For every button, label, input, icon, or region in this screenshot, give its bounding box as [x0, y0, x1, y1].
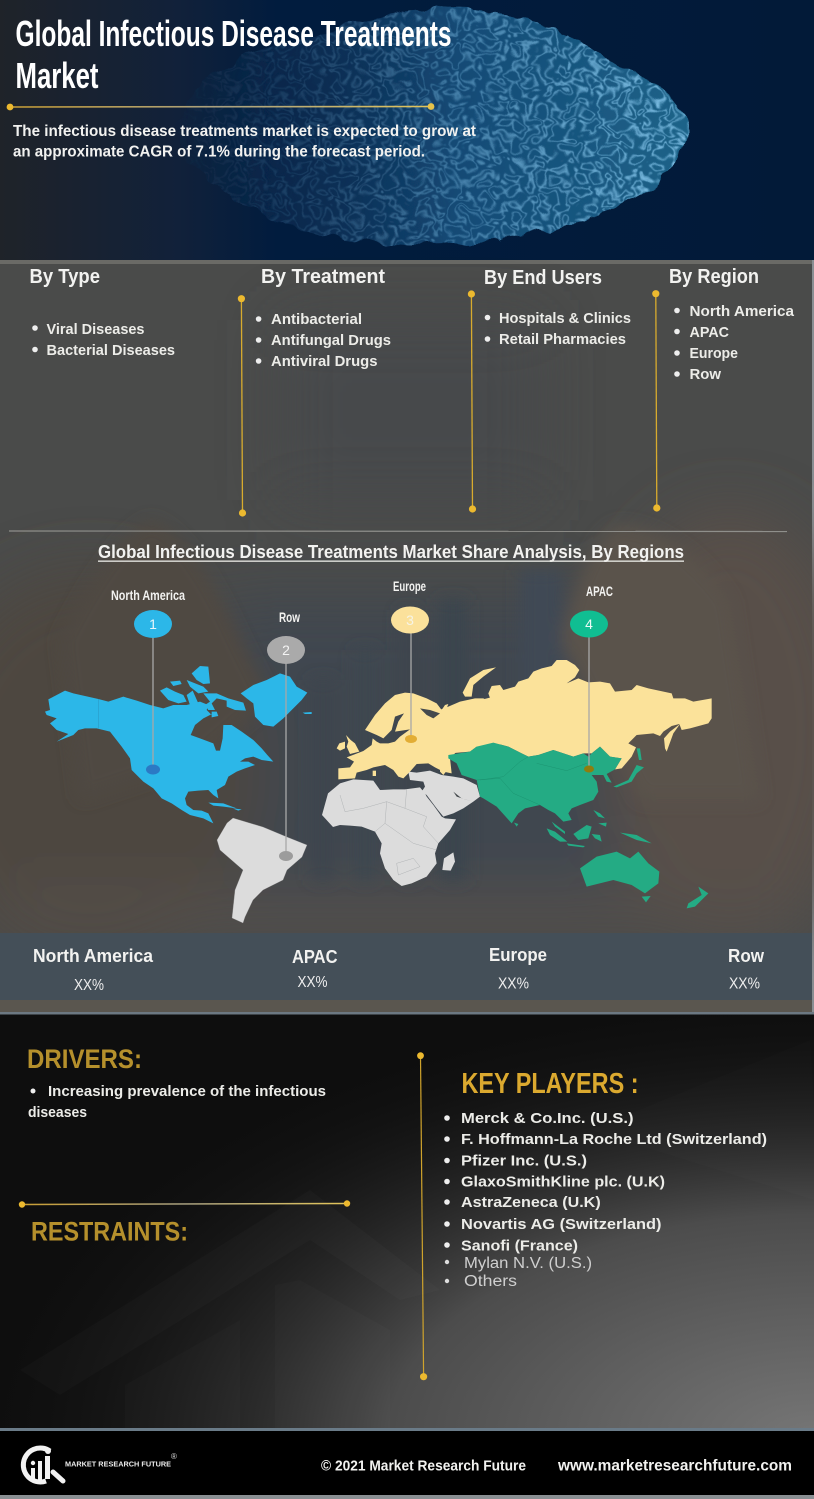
stat: Europe: XX%	[498, 976, 529, 992]
pin 2: Row: Row	[279, 609, 300, 625]
list: Viral Diseases	[46, 321, 144, 338]
world map	[45, 660, 712, 923]
title	[16, 13, 452, 96]
stat: APAC: APAC	[292, 947, 338, 967]
intro text: The infectious disease treatments market is expected to grow at	[13, 123, 476, 140]
heading: By Treatment	[261, 266, 385, 288]
panel: segmentation and map background	[0, 260, 814, 1015]
region: North America	[45, 666, 312, 823]
heading: By Region	[669, 266, 759, 288]
panel: drivers, restraints and key players	[0, 1014, 814, 1431]
pin 4: APAC	[570, 583, 613, 772]
key players list: Novartis AG (Switzerland)	[461, 1216, 662, 1233]
drivers	[27, 1044, 326, 1121]
logo	[23, 1448, 177, 1482]
stat: Europe: Europe	[489, 945, 547, 965]
pin 1: North America: North America	[111, 587, 185, 603]
stat: APAC	[292, 947, 338, 991]
key players list: GlaxoSmithKline plc. (U.K)	[461, 1174, 665, 1191]
virus cell illustration	[176, 10, 686, 245]
list	[674, 303, 795, 383]
pin 4: APAC: APAC	[586, 583, 613, 599]
pin 3: Europe: 3	[406, 612, 414, 628]
region: South America	[217, 818, 307, 923]
stat: North America: XX%	[74, 977, 104, 994]
panel: by type	[30, 266, 175, 359]
drivers list	[28, 1083, 326, 1121]
logo: ®	[171, 1452, 177, 1461]
pin 1: North America	[111, 587, 185, 774]
panel: by end users	[484, 267, 631, 348]
list: Hospitals & Clinics	[499, 310, 631, 327]
panel: by region	[669, 266, 795, 383]
drivers heading: DRIVERS:	[27, 1044, 142, 1074]
stat: North America: North America	[33, 946, 154, 966]
stat: North America	[33, 946, 154, 994]
key players list: Merck & Co.Inc. (U.S.)	[461, 1110, 634, 1127]
list: Europe	[690, 345, 738, 362]
stat: APAC: XX%	[298, 974, 328, 991]
list	[32, 321, 175, 359]
intro text: an approximate CAGR of 7.1% during the forecast period.	[13, 144, 425, 160]
restraints heading: RESTRAINTS:	[31, 1216, 188, 1246]
list: Bacterial Diseases	[46, 342, 175, 359]
stat: Row: Row	[728, 946, 765, 966]
list	[485, 310, 631, 348]
key players list: Mylan N.V. (U.S.)	[464, 1255, 592, 1272]
region: Africa and Middle East	[322, 771, 480, 886]
intro text	[13, 123, 476, 160]
list: Antibacterial	[271, 311, 362, 328]
list: Row	[690, 366, 721, 383]
divider: gold line 2	[468, 290, 476, 513]
divider: gold line 3	[652, 290, 660, 512]
map section heading: Global Infectious Disease Treatments Market Share Analysis, By Regions	[98, 542, 684, 562]
key players list: Pfizer Inc. (U.S.)	[461, 1152, 587, 1170]
pin 2: Row: 2	[282, 642, 290, 658]
stat: Row	[728, 946, 765, 992]
list	[256, 311, 391, 370]
pin 3: Europe	[391, 578, 429, 743]
list: APAC	[690, 324, 729, 341]
list: North America	[690, 303, 795, 320]
website: www.marketresearchfuture.com	[557, 1458, 792, 1474]
divider: gold line 1	[238, 295, 246, 517]
stat: Europe	[489, 945, 547, 992]
heading: By End Users	[484, 267, 602, 289]
panel: footer	[0, 1431, 814, 1499]
panel: hero header	[0, 0, 814, 260]
title: Global Infectious Disease Treatments	[16, 13, 452, 54]
drivers list: Increasing prevalence of the infectious	[48, 1083, 326, 1100]
panel: regional share band	[0, 933, 814, 1014]
pin 3: Europe: Europe	[393, 578, 426, 594]
list: Antifungal Drugs	[271, 332, 391, 349]
drivers/restraints divider	[19, 1200, 350, 1208]
title: Market	[16, 55, 98, 96]
title divider	[7, 103, 434, 110]
stat: Row: XX%	[729, 976, 760, 992]
drivers list: diseases	[28, 1104, 87, 1121]
region: Europe and Russia	[337, 660, 712, 779]
list: Retail Pharmacies	[499, 331, 626, 348]
key players list: AstraZeneca (U.K)	[461, 1194, 601, 1211]
key players	[444, 1068, 767, 1290]
region: Asia Pacific	[448, 743, 708, 908]
vertical divider	[417, 1052, 427, 1380]
panel: by treatment	[256, 266, 391, 370]
key players list	[444, 1110, 767, 1290]
pin 4: APAC: 4	[585, 616, 593, 632]
key players list: F. Hoffmann-La Roche Ltd (Switzerland)	[461, 1131, 767, 1148]
key players heading: KEY PLAYERS :	[462, 1068, 638, 1100]
key players list: Others	[464, 1273, 517, 1290]
pin 2: Row	[267, 609, 305, 861]
list: Antiviral Drugs	[271, 353, 378, 370]
heading: By Type	[30, 266, 100, 288]
key players list: Sanofi (France)	[461, 1238, 578, 1254]
pin 1: North America: 1	[149, 616, 157, 632]
icon: magnifier with bars	[23, 1448, 63, 1482]
copyright: © 2021 Market Research Future	[321, 1458, 526, 1474]
logo: MARKET RESEARCH FUTURE	[65, 1462, 171, 1468]
